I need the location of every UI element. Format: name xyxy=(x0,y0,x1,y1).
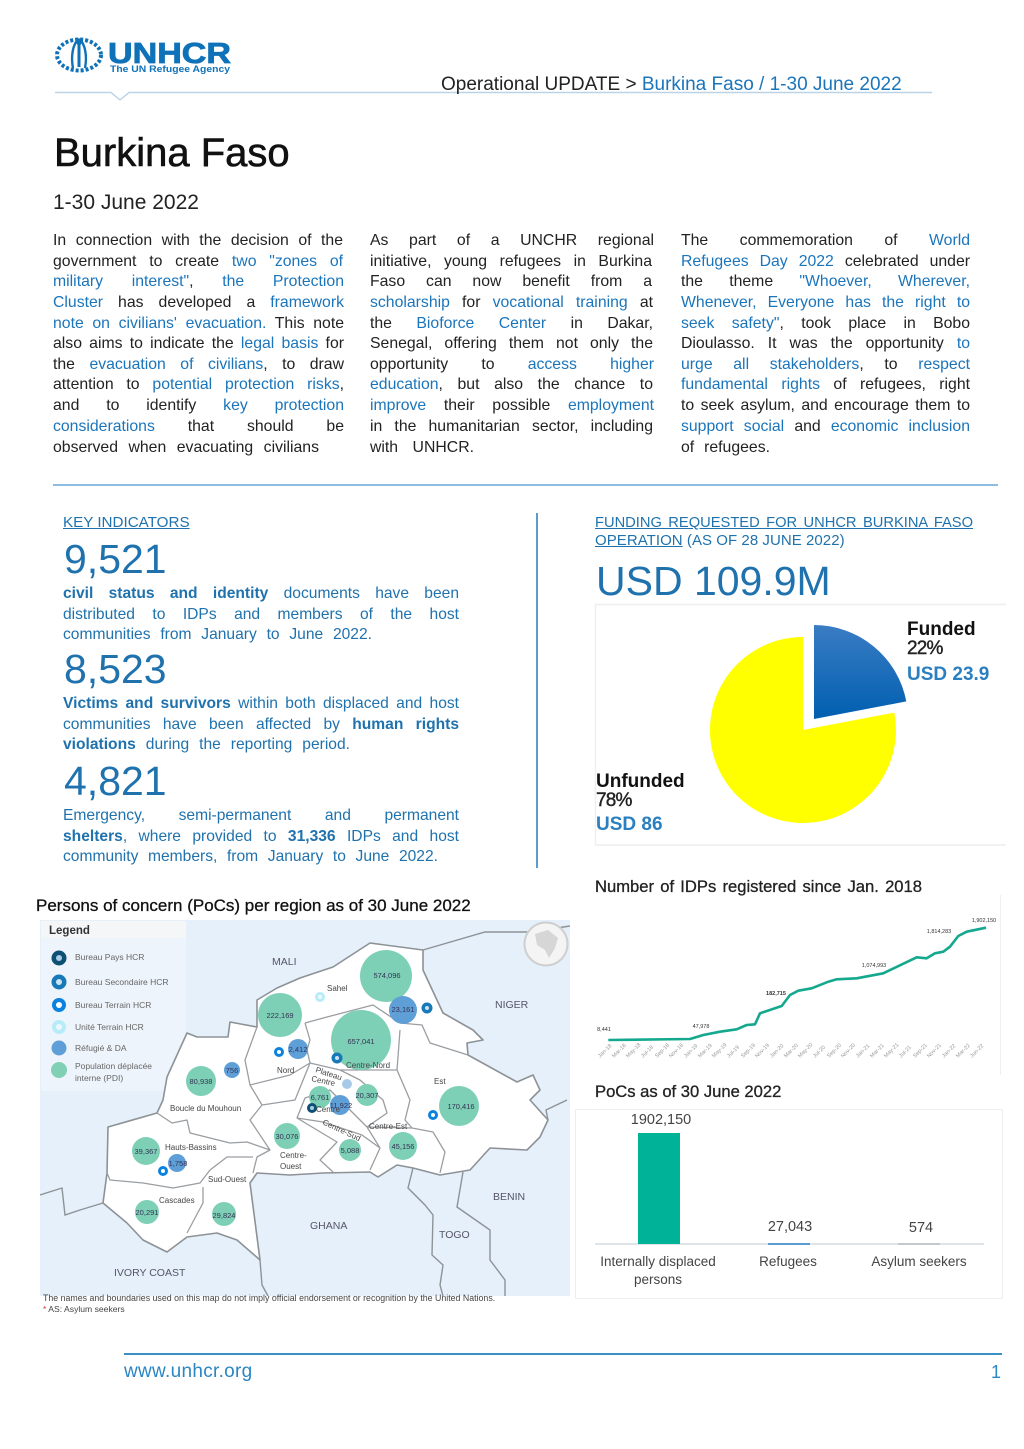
text column 1: the evacuation of civilians, to draw xyxy=(53,356,344,373)
neighbouring country borders xyxy=(40,926,570,1296)
category: IDPs: persons xyxy=(634,1272,682,1287)
category: refugees: Refugees xyxy=(759,1254,817,1269)
panel: legend: Bureau Terrain HCR xyxy=(75,1000,151,1010)
text column 2: education, but also the chance to xyxy=(370,376,653,393)
indicator text: shelters xyxy=(63,807,459,865)
footer page number: 1 xyxy=(991,1362,1001,1382)
panel: legend: Réfugié & DA xyxy=(75,1043,127,1053)
bubbles: refugees and asylum seekers xyxy=(168,996,417,1172)
bubble value labels: 23,161 xyxy=(392,1005,414,1014)
bubble value labels: 20,291 xyxy=(136,1208,158,1217)
neighbouring country labels: IVORY COAST xyxy=(114,1267,186,1279)
indicator: shelters: 4,821 xyxy=(64,758,167,804)
footer rule xyxy=(124,1353,1002,1354)
indicator text: victims xyxy=(63,695,459,753)
neighbouring country labels: GHANA xyxy=(310,1220,347,1232)
text column 2: opportunity to access higher xyxy=(370,356,654,373)
month axis labels: Mar-20 xyxy=(783,1043,800,1059)
label: funded: Funded xyxy=(907,619,976,640)
text column 2: with UNHCR. xyxy=(370,439,474,456)
text column 2: in the humanitarian sector, including xyxy=(370,418,653,435)
funding heading: FUNDING REQUESTED FOR UNHCR BURKINA FASO xyxy=(595,515,973,531)
region name labels: Centre-Est xyxy=(369,1122,408,1131)
text column 1: attention to potential protection risks, xyxy=(53,376,344,393)
value: IDPs: 1902,150 xyxy=(631,1112,691,1128)
bar chart title: PoCs as of 30 June 2022 xyxy=(595,1082,781,1101)
month axis labels: Mar-19 xyxy=(697,1043,714,1059)
label: unfunded xyxy=(596,771,685,835)
text column 2: initiative, young refugees in Burkina xyxy=(370,253,652,270)
month axis labels xyxy=(597,1042,985,1059)
data labels: 182,715 xyxy=(766,991,786,997)
month axis labels: Mar-22 xyxy=(955,1043,972,1059)
text column 3: to seek asylum, and encourage them to xyxy=(681,397,970,414)
bubble value labels: 657,041 xyxy=(347,1037,375,1046)
text column 2: Faso can now benefit from a xyxy=(370,273,652,290)
text column 3: fundamental rights of refugees, right xyxy=(681,376,970,393)
category: IDPs xyxy=(600,1254,716,1287)
bubble value labels xyxy=(135,971,475,1220)
bubble value labels: 170,416 xyxy=(447,1102,475,1111)
text column 1: Cluster has developed a framework xyxy=(53,294,344,311)
label: funded: USD 23.9 xyxy=(907,664,989,685)
text column 3: urge all stakeholders, to respect xyxy=(681,356,970,373)
bubbles: IDP population xyxy=(132,950,479,1226)
indicator text: documents: communities from January to June 2022. xyxy=(63,626,372,643)
text column 3: The commemoration of World xyxy=(681,232,970,249)
data labels xyxy=(597,918,996,1033)
label: unfunded: Unfunded xyxy=(596,771,685,792)
month axis labels: Mar-21 xyxy=(869,1043,886,1059)
footer website: www.unhcr.org xyxy=(124,1361,253,1382)
month axis labels: May-21 xyxy=(883,1042,900,1059)
month axis labels: Jul-20 xyxy=(812,1045,827,1059)
UNHCR office markers xyxy=(158,992,438,1176)
neighbouring country labels: BENIN xyxy=(493,1191,525,1203)
label: funded xyxy=(907,619,989,685)
data labels: 1,902,150 xyxy=(972,918,996,924)
bubble value labels: 20,307 xyxy=(356,1091,378,1100)
map: persons of concern per region xyxy=(40,920,570,1296)
bubble value labels: 222,169 xyxy=(266,1011,294,1020)
text column 2: Senegal, offering them not only the xyxy=(370,335,653,352)
text column 3: Refugees Day 2022 celebrated under xyxy=(681,253,970,270)
bubble value labels: 1,758 xyxy=(169,1159,187,1168)
panel: legend: interne (PDI) xyxy=(75,1073,123,1083)
value: refugees: 27,043 xyxy=(768,1219,812,1235)
header: UNHCR logo xyxy=(55,38,232,74)
text column 2: scholarship for vocational training at xyxy=(370,294,653,311)
section divider xyxy=(53,484,998,486)
bar: asylum seekers xyxy=(898,1243,940,1244)
panel: legend: Population déplacée xyxy=(75,1061,152,1071)
text column 1: In connection with the decision of the xyxy=(53,232,343,249)
panel: legend: Unité Terrain HCR xyxy=(75,1022,144,1032)
region name labels: Cascades xyxy=(159,1196,195,1205)
month axis labels: May-19 xyxy=(711,1042,728,1059)
label: unfunded: 78% xyxy=(596,790,633,811)
category: IDPs: Internally displaced xyxy=(600,1254,716,1269)
region name labels: Sahel xyxy=(327,984,348,993)
text column 1: and to identify key protection xyxy=(53,397,344,414)
region name labels: Boucle du Mouhoun xyxy=(170,1104,241,1113)
panel: key indicators xyxy=(63,514,459,865)
month axis labels: Mar-18 xyxy=(611,1043,628,1059)
region boundaries xyxy=(107,1005,468,1233)
indicator text: victims: violations during the reporting period. xyxy=(63,736,350,753)
panel: legend: Bureau Pays HCR xyxy=(75,952,144,962)
month axis labels: May-18 xyxy=(625,1042,642,1059)
month axis labels: Sep-18 xyxy=(654,1043,671,1059)
bubble value labels: 80,938 xyxy=(190,1077,212,1086)
month axis labels: Nov-19 xyxy=(754,1043,771,1059)
month axis labels: Jan-18 xyxy=(597,1043,613,1059)
header breadcrumb: Operational UPDATE > Burkina Faso / 1-30 June 2022 xyxy=(441,74,902,95)
neighbouring country labels xyxy=(114,956,529,1279)
country fill: Burkina Faso xyxy=(103,943,548,1260)
indicator text: shelters: shelters, where provided to 31,336 IDPs and host xyxy=(63,828,459,845)
funding heading: OPERATION (AS OF 28 JUNE 2022) xyxy=(595,532,845,549)
indicator text: documents: distributed to IDPs and members of the host xyxy=(63,606,459,623)
panel: PoCs bar chart xyxy=(575,1109,1003,1299)
panel: legend: Legend xyxy=(49,925,90,937)
logo tagline: The UN Refugee Agency xyxy=(110,64,230,74)
label: unfunded: USD 86 xyxy=(596,814,663,835)
month axis labels: Nov-20 xyxy=(840,1043,857,1059)
indicator text: shelters: community members, from January to June 2022. xyxy=(63,848,438,865)
month axis labels: Jul-21 xyxy=(898,1045,913,1059)
region name labels: Nord xyxy=(277,1066,294,1075)
label: funded: 22% xyxy=(907,638,944,659)
bubble value labels: 2,412 xyxy=(289,1045,307,1054)
key indicators heading: KEY INDICATORS xyxy=(63,514,190,531)
text column 3 xyxy=(681,232,970,456)
value: asylum seekers: 574 xyxy=(909,1220,933,1236)
region name labels: Centre-Sud xyxy=(321,1118,362,1143)
month axis labels: Jul-19 xyxy=(726,1045,741,1059)
month axis labels: Jan-22 xyxy=(941,1043,957,1059)
bubble value labels: 5,088 xyxy=(341,1146,359,1155)
panel: funding pie chart xyxy=(595,604,1006,846)
month axis labels: Sep-19 xyxy=(740,1043,757,1059)
text column 3: Whenever, Everyone has the right to xyxy=(681,294,970,311)
region name labels: Plateau xyxy=(314,1065,343,1082)
funding total: USD 109.9M xyxy=(596,558,831,604)
text column 1 xyxy=(53,232,344,456)
region name labels: Hauts-Bassins xyxy=(165,1143,217,1152)
logo wordmark: UNHCR xyxy=(108,38,231,70)
region name labels: Centre- xyxy=(280,1151,307,1160)
text column 2: the Bioforce Center in Dakar, xyxy=(370,315,653,332)
pie slice: funded xyxy=(814,625,906,719)
text column 2: improve their possible employment xyxy=(370,397,654,414)
line chart title: Number of IDPs registered since Jan. 2018 xyxy=(595,877,922,896)
month axis labels: Sep-20 xyxy=(826,1043,843,1059)
data labels: 8,441 xyxy=(597,1027,611,1033)
panel: legend: Bureau Secondaire HCR xyxy=(75,977,169,987)
line chart: IDPs registered xyxy=(597,895,1001,1075)
region name labels: Sud-Ouest xyxy=(208,1175,247,1184)
text column 1: also aims to indicate the legal basis for xyxy=(53,335,344,352)
bar: IDPs xyxy=(638,1133,680,1244)
region name labels: Centre xyxy=(311,1074,336,1088)
date: 1-30 June 2022 xyxy=(53,191,199,214)
icon: globe xyxy=(524,922,568,966)
text column 3: support social and economic inclusion xyxy=(681,418,970,435)
text column 3: the theme "Whoever, Wherever, xyxy=(681,273,970,290)
text column 3: of refugees. xyxy=(681,439,770,456)
neighbouring country labels: TOGO xyxy=(439,1229,470,1241)
bubble value labels: 756 xyxy=(226,1066,238,1075)
indicator: documents: 9,521 xyxy=(64,536,167,582)
month axis labels: Jan-20 xyxy=(769,1043,785,1059)
category: asylum seekers: Asylum seekers xyxy=(871,1254,967,1269)
region name labels xyxy=(159,984,446,1205)
indicator text: victims: communities have been affected by human rights xyxy=(63,716,459,733)
region name labels: Centre-Nord xyxy=(346,1061,390,1070)
data labels: 1,074,993 xyxy=(862,963,886,969)
pie slice: unfunded xyxy=(710,637,896,823)
indicator text: victims: Victims and survivors within both displaced and host xyxy=(63,695,459,712)
data labels: 1,814,283 xyxy=(927,929,951,935)
month axis labels: Sep-21 xyxy=(912,1043,929,1059)
map disclaimer: The names and boundaries used on this map do not imply official endorsement or recognition by the United Nations. xyxy=(43,1293,495,1303)
map footnote: * AS: Asylum seekers xyxy=(43,1304,125,1314)
vertical divider xyxy=(536,513,538,868)
title: Burkina Faso xyxy=(54,131,290,175)
axis line xyxy=(595,1243,984,1245)
month axis labels: Nov-18 xyxy=(668,1043,685,1059)
bubble value labels: 6,761 xyxy=(311,1093,329,1102)
text column 2 xyxy=(370,232,654,456)
bubble value labels: 39,367 xyxy=(135,1147,157,1156)
header rule with chevron xyxy=(55,92,932,101)
region name labels: Ouest xyxy=(280,1162,302,1171)
region name labels: Centre xyxy=(316,1105,341,1114)
region name labels: Est xyxy=(434,1077,446,1086)
text column 1: military interest", the Protection xyxy=(53,273,344,290)
bubble value labels: 574,096 xyxy=(373,971,401,980)
month axis labels: Jan-19 xyxy=(683,1043,699,1059)
text column 3: seek safety", took place in Bobo xyxy=(681,315,970,332)
month axis labels: Jan-21 xyxy=(855,1043,871,1059)
bubble value labels: 30,076 xyxy=(276,1132,298,1141)
indicator text: documents: civil status and identity documents have been xyxy=(63,585,459,602)
bubble value labels: 45,156 xyxy=(392,1142,414,1151)
icon: UNHCR emblem xyxy=(57,39,101,70)
month axis labels: May-20 xyxy=(797,1042,814,1059)
month axis labels: Jun-22 xyxy=(969,1043,985,1059)
funding heading xyxy=(595,515,973,549)
text column 1: considerations that should be xyxy=(53,418,344,435)
neighbouring country labels: NIGER xyxy=(495,999,529,1011)
map title: Persons of concern (PoCs) per region as of 30 June 2022 xyxy=(36,896,471,915)
panel: legend xyxy=(49,925,169,1083)
month axis labels: Jul-18 xyxy=(640,1045,655,1059)
line series xyxy=(608,928,986,1040)
text column 2: As part of a UNCHR regional xyxy=(370,232,654,249)
bar: refugees xyxy=(768,1243,810,1244)
text column 1: government to create two "zones of xyxy=(53,253,343,270)
bubble value labels: 11,922 xyxy=(330,1101,352,1110)
indicator text: shelters: Emergency, semi-permanent and permanent xyxy=(63,807,459,824)
neighbouring country labels: MALI xyxy=(272,956,297,968)
text column 3: Dioulasso. It was the opportunity to xyxy=(681,335,970,352)
indicator text: documents xyxy=(63,585,459,643)
indicator: victims: 8,523 xyxy=(64,646,167,692)
bubble value labels: 29,824 xyxy=(213,1211,235,1220)
data labels: 47,978 xyxy=(693,1024,709,1030)
text column 1: observed when evacuating civilians xyxy=(53,439,319,456)
text column 1: note on civilians' evacuation. This note xyxy=(53,315,344,332)
month axis labels: Nov-21 xyxy=(926,1043,943,1059)
